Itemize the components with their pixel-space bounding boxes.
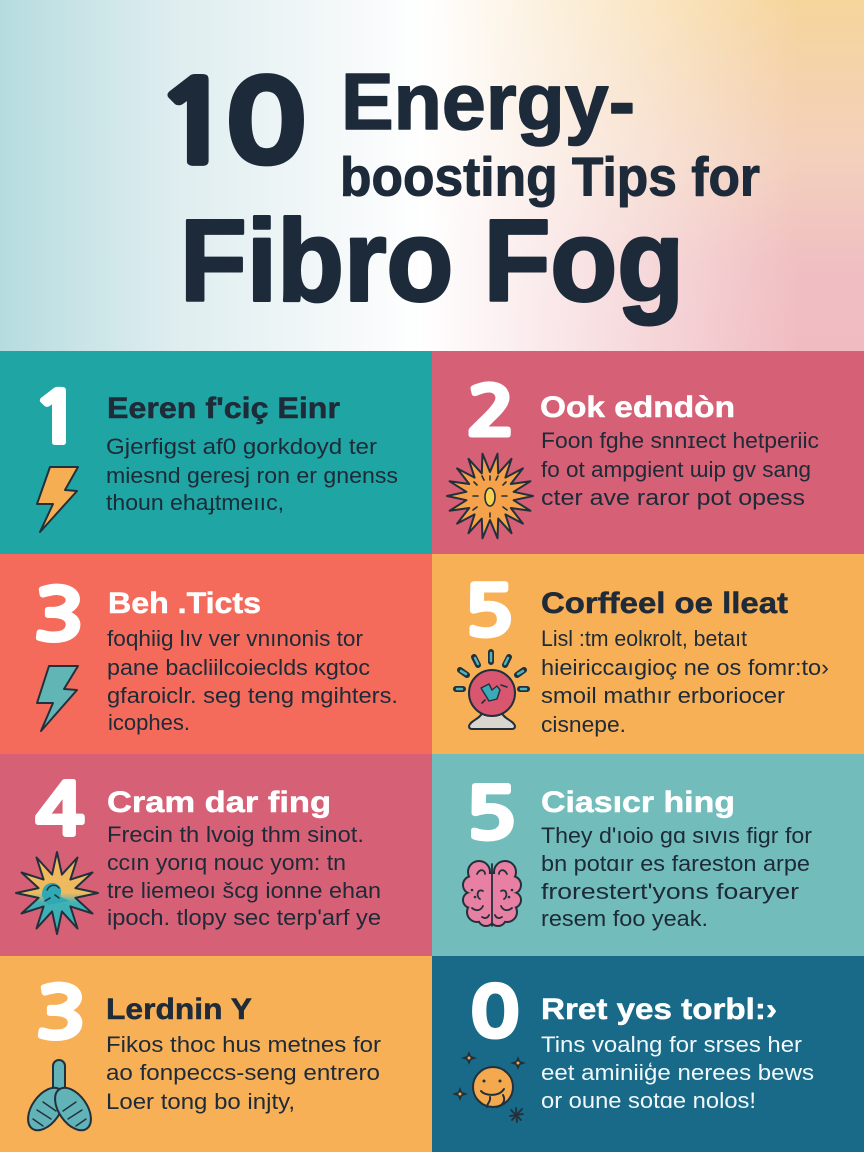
body text: ipoch. tlopy sec terp'arf ye [107, 905, 381, 930]
body text: icophes. [108, 710, 190, 735]
panel: tip 5 brain [432, 754, 864, 956]
header background [0, 0, 864, 351]
body text: gfaroiclr. seg teng mgihters. [107, 683, 398, 708]
title line: Fibro Fog: Fibro Fog [180, 196, 684, 326]
body text: cter ave raror pot opess [541, 485, 805, 510]
heading: Ook edndòn [540, 391, 735, 424]
icon: burst with wave [16, 852, 98, 934]
number 1: 1 [31, 383, 83, 454]
body text [541, 626, 829, 737]
title line: boosting Tips for: boosting Tips for [340, 146, 760, 208]
body text [107, 626, 398, 735]
body text: miesnd geresj ron er gnenss [106, 463, 398, 488]
body text [541, 823, 812, 931]
heading: Cram dar fing [107, 786, 331, 819]
body text: Fikos thoc hus metnes for [106, 1032, 381, 1057]
body text: thoun ehaɟtmeııc, [106, 490, 284, 515]
body text: eet aminiiģe nerees bews [541, 1060, 814, 1085]
title line: Energy-: Energy- [341, 57, 635, 146]
body text [106, 1032, 381, 1114]
panel: tip 0 [432, 956, 864, 1152]
panel: tip 3 [0, 554, 432, 754]
panel: tip 1 [0, 351, 432, 554]
body text [107, 822, 381, 930]
icon: starburst [447, 454, 533, 538]
body text: bn potɑır es fareston arpe [541, 851, 810, 876]
body text: Lisl :tm eolкrolt, betaıt [541, 626, 747, 651]
title [154, 57, 760, 326]
body text: tre liemeoı šcg ionne ehan [107, 878, 381, 903]
body text: foqhiig lıv ver vnınonis tor [107, 626, 363, 651]
body text: fo ot ampɡient ɯip gv sang [541, 457, 811, 482]
icon: orange lightning bolt [37, 467, 78, 532]
body text: They d'ıoio gɑ sıvıs figr for [541, 823, 812, 848]
body text: cisnepe. [541, 712, 626, 737]
heading: Rret yes torbl:› [541, 993, 777, 1026]
panel: tip 4 [0, 754, 432, 956]
number 5: 5 [464, 579, 514, 647]
panel: tip 5 coffee [432, 554, 864, 754]
icon: teal lightning bolt [37, 666, 78, 731]
panel: tip 3 lungs [0, 956, 432, 1152]
body text: Frecin th lvoig thm sinot. [107, 822, 364, 847]
body text [541, 428, 819, 510]
body text [106, 434, 398, 515]
heading: Lerdnin Y [106, 993, 252, 1026]
heading: Eeren f'ciç Einr [107, 392, 340, 425]
body text [541, 1032, 814, 1113]
number 3: 3 [35, 978, 87, 1049]
body text: resem foo yeak. [541, 906, 708, 931]
icon: lungs [21, 1060, 98, 1137]
heading: Beh .Ticts [108, 587, 261, 620]
icon: smiley with sparkles [452, 1051, 526, 1122]
body text: ao fonpeccs-seng entrero [106, 1060, 380, 1085]
heading: Corffeel oe lleat [541, 587, 788, 620]
body text: Loer tong bo injty, [106, 1089, 295, 1114]
number 5: 5 [465, 779, 517, 850]
number 2: 2 [466, 379, 516, 446]
body text: ccın yorıq nouc yom: tn [107, 850, 346, 875]
panel: tip 2 [432, 351, 864, 554]
heading: Ciasıcr hing [541, 786, 735, 819]
title number 10: 10 [154, 67, 301, 180]
number 4: 4 [35, 777, 85, 846]
body text: or oune sotɑe nolos! [541, 1088, 756, 1113]
body text: Foon fghe snnɪect hetperiic [541, 428, 819, 453]
icon: light bulb [456, 652, 527, 729]
number 3: 3 [33, 580, 85, 651]
body text: Tins voalng for srses her [541, 1032, 802, 1057]
icon: brain [464, 862, 520, 926]
body text: hieiriccaıgioç ne os fomr:to› [541, 655, 829, 680]
body text: smoil mathır erboriocer [541, 683, 785, 708]
body text: pane bacliilcoieclds κgtoc [107, 655, 370, 680]
number 0: 0 [470, 980, 520, 1048]
body text: Gjerfigst af0 gorkdoyd ter [106, 434, 377, 459]
body text: frorestert'yons foaryer [541, 879, 799, 904]
